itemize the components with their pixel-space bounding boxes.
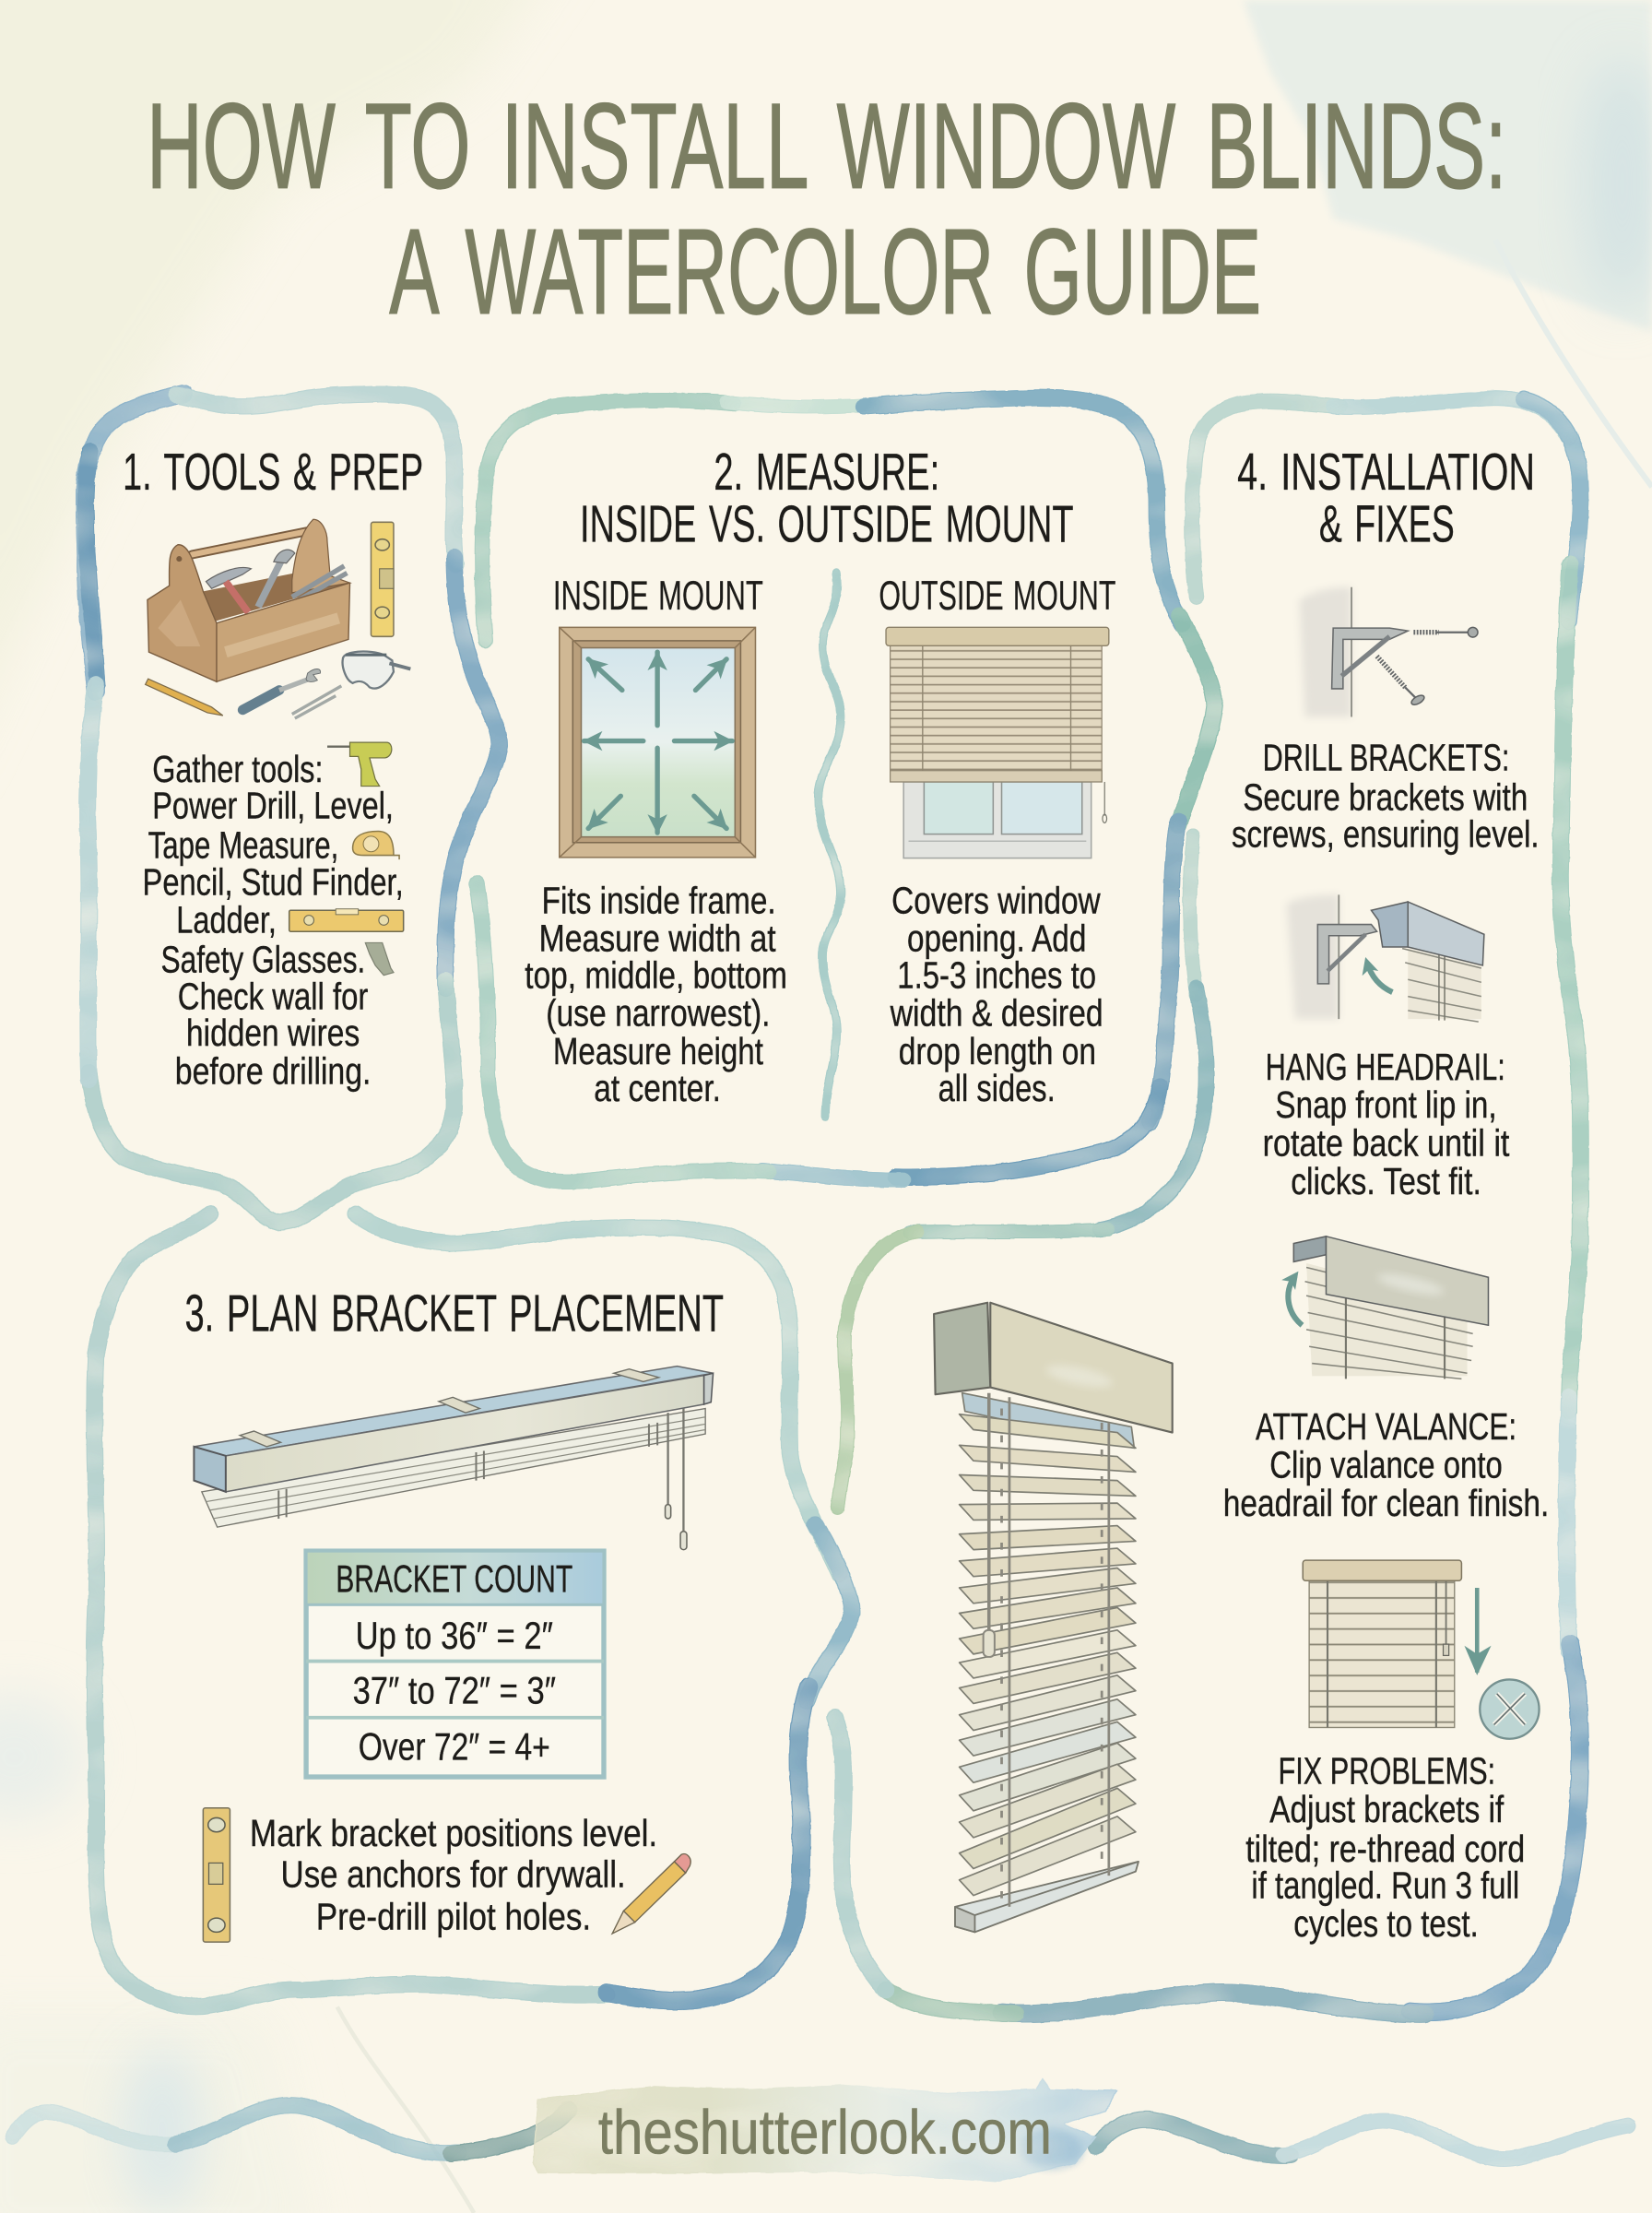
text: fix problems: Adjust brackets if bbox=[1269, 1788, 1504, 1830]
text: attach valance: Clip valance onto bbox=[1269, 1444, 1503, 1486]
icon: wooden toolbox bbox=[148, 519, 350, 681]
text: outside mount bbox=[890, 879, 1103, 1109]
text: outside mount: all sides. bbox=[938, 1067, 1056, 1109]
panel border: installation bbox=[835, 398, 1581, 2014]
text: outside mount: 1.5-3 inches to bbox=[897, 953, 1096, 996]
ribbon waves bbox=[13, 2105, 1628, 2160]
icon: bracket and screws bbox=[1299, 587, 1478, 717]
text: fix problems: if tangled. Run 3 full bbox=[1251, 1864, 1519, 1907]
text: gather tools: hidden wires bbox=[186, 1012, 360, 1054]
icon: pencil bbox=[612, 1854, 690, 1934]
table header bbox=[306, 1551, 604, 1604]
text: fix problems bbox=[1245, 1750, 1525, 1945]
ribbon patch bbox=[532, 2077, 1117, 2182]
table rows bbox=[336, 1558, 572, 1769]
icon: tape measure bbox=[353, 832, 399, 859]
subheading: outside mount: OUTSIDE MOUNT bbox=[879, 574, 1115, 619]
icon: pencil bbox=[146, 679, 223, 716]
text: gather tools: Power Drill, Level, bbox=[152, 785, 394, 827]
table: bracket count bbox=[306, 1551, 604, 1777]
panel border: bracket placement bbox=[95, 1213, 852, 2006]
icon: drill bbox=[327, 742, 392, 787]
text: gather tools: before drilling. bbox=[175, 1050, 371, 1093]
valance bbox=[934, 1303, 1173, 1433]
panel border: measure bbox=[477, 397, 1215, 1182]
heading: plan bracket placement: 3. PLAN BRACKET PLACEMENT bbox=[184, 1284, 724, 1342]
text: hang headrail: Snap front lip in, bbox=[1275, 1083, 1497, 1126]
heading: measure: INSIDE VS. OUTSIDE MOUNT bbox=[580, 495, 1074, 553]
text: inside mount: Measure width at bbox=[539, 917, 776, 960]
text: gather tools: Pencil, Stud Finder, bbox=[143, 860, 404, 903]
text: outside mount: opening. Add bbox=[907, 917, 1086, 960]
text: gather tools: Ladder, bbox=[176, 899, 277, 941]
bottom rail bbox=[955, 1862, 1139, 1932]
text: drill brackets: Secure brackets with bbox=[1243, 776, 1528, 819]
illustration: outside mount blind over window bbox=[886, 627, 1109, 858]
icon: small level bbox=[289, 909, 404, 931]
text: outside mount: width & desired bbox=[890, 992, 1103, 1035]
text: marking instructions bbox=[250, 1812, 657, 1937]
text: inside mount: Fits inside frame. bbox=[542, 879, 776, 921]
table rows: 37″ to 72″ = 3″ bbox=[353, 1669, 556, 1711]
text: fix problems: FIX PROBLEMS: bbox=[1278, 1750, 1495, 1793]
table rows: BRACKET COUNT bbox=[336, 1558, 572, 1601]
icon: vertical level bbox=[203, 1808, 230, 1942]
text: marking instructions: Use anchors for drywall. bbox=[281, 1852, 626, 1895]
text: gather tools: Tape Measure, bbox=[148, 824, 338, 867]
text: marking instructions: Pre-drill pilot holes. bbox=[316, 1895, 591, 1937]
text: hang headrail: HANG HEADRAIL: bbox=[1266, 1046, 1505, 1088]
panel: 3 plan bracket placement bbox=[95, 1213, 852, 2006]
text: fix problems: cycles to test. bbox=[1293, 1902, 1479, 1945]
text: gather tools: Check wall for bbox=[178, 975, 368, 1017]
heading: tools and prep: 1. TOOLS & PREP bbox=[123, 443, 423, 501]
panel border: tools bbox=[85, 394, 500, 1223]
text: inside mount: (use narrowest). bbox=[546, 992, 771, 1035]
text: drill brackets: DRILL BRACKETS: bbox=[1263, 737, 1509, 779]
heading: installation and fixes bbox=[1237, 443, 1535, 553]
table rows: Up to 36″ = 2″ bbox=[356, 1615, 553, 1657]
icon: spirit level bbox=[371, 522, 394, 636]
text: gather tools: Safety Glasses. bbox=[160, 939, 365, 981]
text: inside mount bbox=[525, 879, 787, 1109]
text: gather tools: Gather tools: bbox=[152, 748, 323, 790]
icon: scraper bbox=[292, 686, 341, 718]
heading: installation and fixes: 4. INSTALLATION bbox=[1237, 443, 1535, 501]
panel: large blind illustration bbox=[934, 1303, 1173, 1932]
divider wave bbox=[819, 573, 841, 1117]
text: attach valance bbox=[1223, 1405, 1549, 1524]
text: drill brackets: screws, ensuring level. bbox=[1232, 812, 1540, 855]
text: inside mount: top, middle, bottom bbox=[525, 953, 787, 996]
icon: blind with down arrow and repair badge bbox=[1303, 1560, 1540, 1739]
text: inside mount: at center. bbox=[594, 1067, 721, 1109]
panel: 2 measure bbox=[477, 397, 1215, 1182]
icon: hang headrail bbox=[1287, 894, 1484, 1022]
text: attach valance: ATTACH VALANCE: bbox=[1256, 1405, 1516, 1448]
illustration: window with measuring arrows bbox=[560, 627, 755, 858]
text: fix problems: tilted; re-thread cord bbox=[1245, 1828, 1525, 1870]
heading: measure: 2. MEASURE: bbox=[714, 443, 939, 501]
text: hang headrail bbox=[1263, 1046, 1509, 1202]
panel: 1 tools and prep bbox=[85, 394, 500, 1223]
text: outside mount: drop length on bbox=[899, 1030, 1096, 1072]
text: attach valance: headrail for clean finish. bbox=[1223, 1482, 1549, 1524]
blind slats bbox=[960, 1393, 1136, 1896]
heading: measure bbox=[580, 443, 1074, 553]
text: marking instructions: Mark bracket positions level. bbox=[250, 1812, 657, 1854]
text: inside mount: Measure height bbox=[553, 1030, 763, 1072]
text: hang headrail: rotate back until it bbox=[1263, 1122, 1509, 1165]
footer ribbon with website bbox=[13, 2077, 1628, 2182]
icon: attach valance bbox=[1288, 1237, 1488, 1379]
subheading: inside mount: INSIDE MOUNT bbox=[553, 574, 763, 619]
panel: 4 installation and fixes bbox=[835, 398, 1581, 2014]
icon: small glasses bbox=[365, 942, 394, 976]
icon: wrench bbox=[242, 669, 321, 710]
website url: theshutterlook.com bbox=[598, 2099, 1052, 2168]
text: gather tools bbox=[143, 748, 404, 1093]
illustration: headrail with brackets bbox=[194, 1367, 714, 1550]
icon: safety goggles bbox=[343, 652, 410, 689]
heading: installation and fixes: & FIXES bbox=[1319, 495, 1455, 553]
text: outside mount: Covers window bbox=[891, 879, 1101, 921]
ladder strings and pull cord bbox=[984, 1393, 1109, 1907]
text: drill brackets bbox=[1232, 737, 1540, 855]
table rows: Over 72″ = 4+ bbox=[359, 1726, 550, 1769]
text: hang headrail: clicks. Test fit. bbox=[1291, 1160, 1481, 1202]
title bbox=[147, 78, 1506, 339]
